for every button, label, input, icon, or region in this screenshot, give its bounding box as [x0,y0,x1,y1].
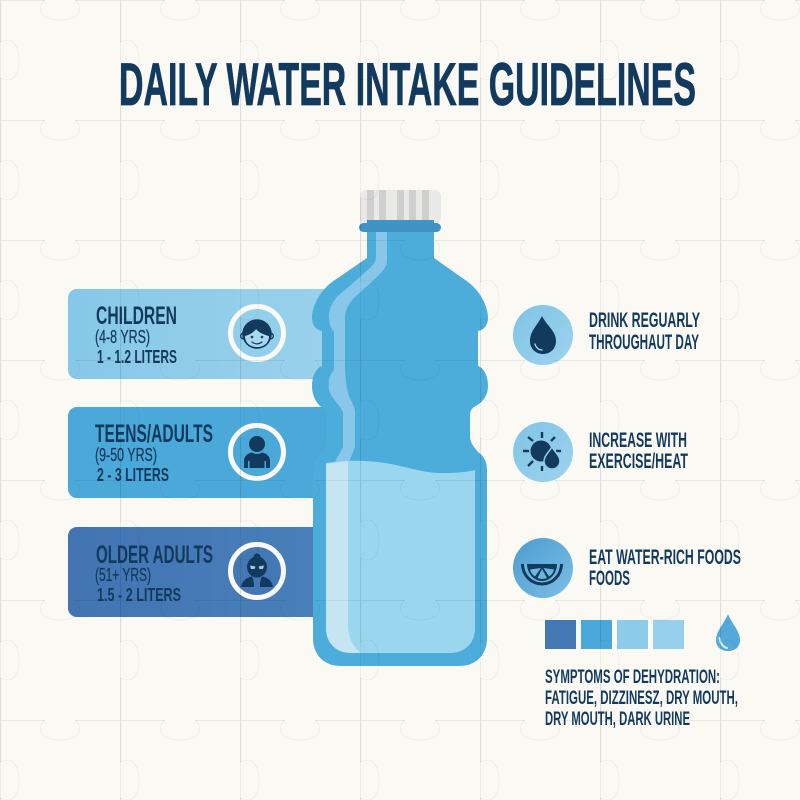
panel: older adults [68,527,328,617]
bottle collar [359,220,441,232]
text block: older adults: 1.5 - 2 LITERS [97,585,181,605]
text block: teens and adults: (9-50 YRS) [95,445,157,465]
text: drink regularly: THROUGHAUT DAY [589,331,699,354]
icon: child face [230,306,284,360]
icon: water drop circle [513,305,573,365]
text: eat water-rich foods [589,546,741,590]
text block: children: (4-8 YRS) [95,327,150,347]
text block: children: CHILDREN [96,302,177,330]
text block: teens and adults: TEENS/ADULTS [95,420,213,448]
icon: small water drop [716,614,740,651]
text block: children [95,302,177,367]
bottle body [312,230,488,666]
text block: teens and adults: 2 - 3 LITERS [97,465,169,485]
text: eat water-rich foods: FOODS [589,567,630,590]
icon: older person [230,544,284,598]
text block: older adults: (51+ YRS) [95,565,151,585]
illustration: water bottle [312,190,488,666]
text block: older adults [95,541,213,605]
water highlight [326,461,361,653]
text: increase with exercise: EXERCISE/HEAT [589,450,688,473]
water fill [326,461,475,653]
text block: older adults: OLDER ADULTS [96,541,213,569]
text: increase with exercise: INCREASE WITH [589,429,687,452]
panel: teens and adults [68,407,348,498]
text block: symptoms of dehydration: DRY MOUTH, DARK URINE [545,709,690,730]
text block: teens and adults [95,420,213,485]
icon: sun and drop circle [513,422,573,482]
text: increase with exercise [589,429,688,473]
text: drink regularly: DRINK REGUARLY [589,309,700,332]
panel: children [68,289,348,379]
text block: children: 1 - 1.2 LITERS [97,347,177,367]
colour swatches [545,620,684,649]
bottle highlight [329,232,387,462]
text: drink regularly [589,309,700,354]
text block: symptoms of dehydration [545,667,738,730]
icon: citrus slice circle [513,538,573,598]
icon: adult person [230,426,284,478]
bottle cap [360,190,441,224]
